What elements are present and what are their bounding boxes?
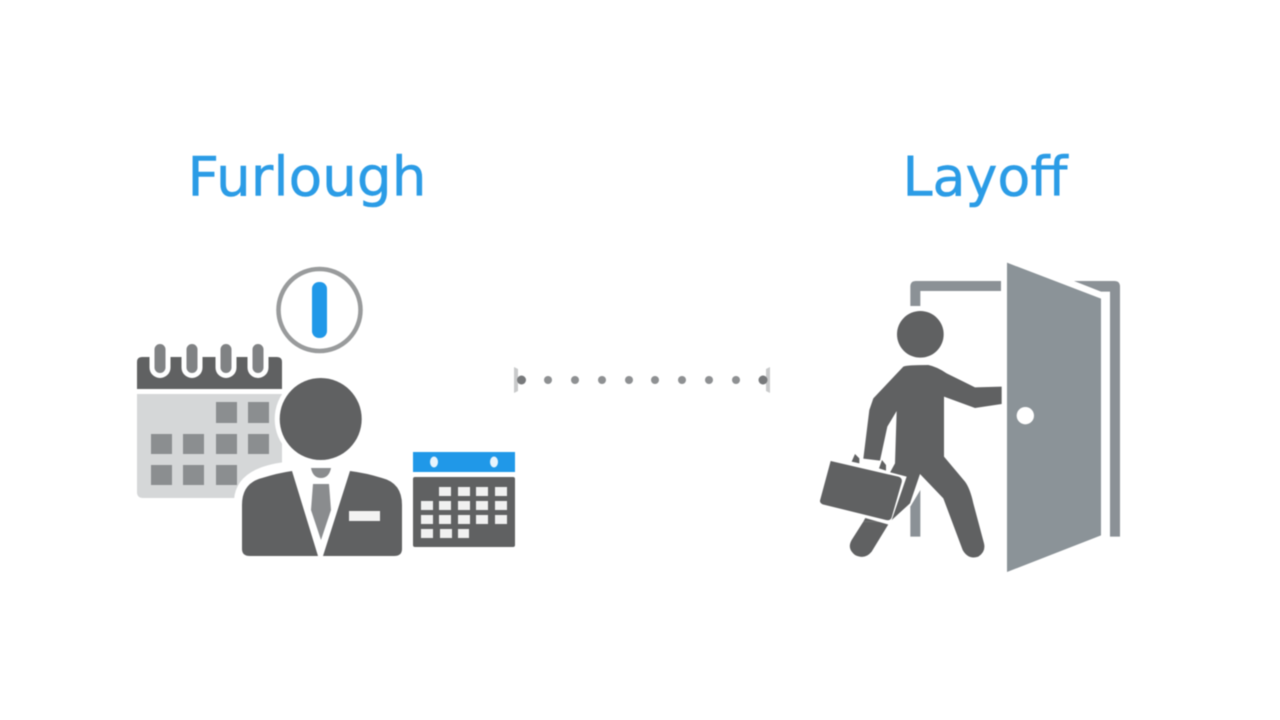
icon: clock [278, 269, 360, 351]
icon: small calendar [413, 452, 515, 547]
icon: person in suit [234, 373, 408, 560]
icon: person leaving through door [813, 263, 1120, 572]
icon: large wall calendar [137, 342, 282, 498]
icon: door frame [910, 281, 1120, 537]
icon: furlough employee with calendars and clock [137, 269, 515, 560]
heading: Layoff: Layoff [902, 146, 1069, 208]
dotted connector between furlough and layoff [514, 367, 770, 393]
icon: open door [1007, 263, 1101, 572]
icon: briefcase [813, 454, 907, 525]
icon: walking person with briefcase [813, 311, 1002, 557]
heading: Furlough: Furlough [188, 146, 426, 208]
